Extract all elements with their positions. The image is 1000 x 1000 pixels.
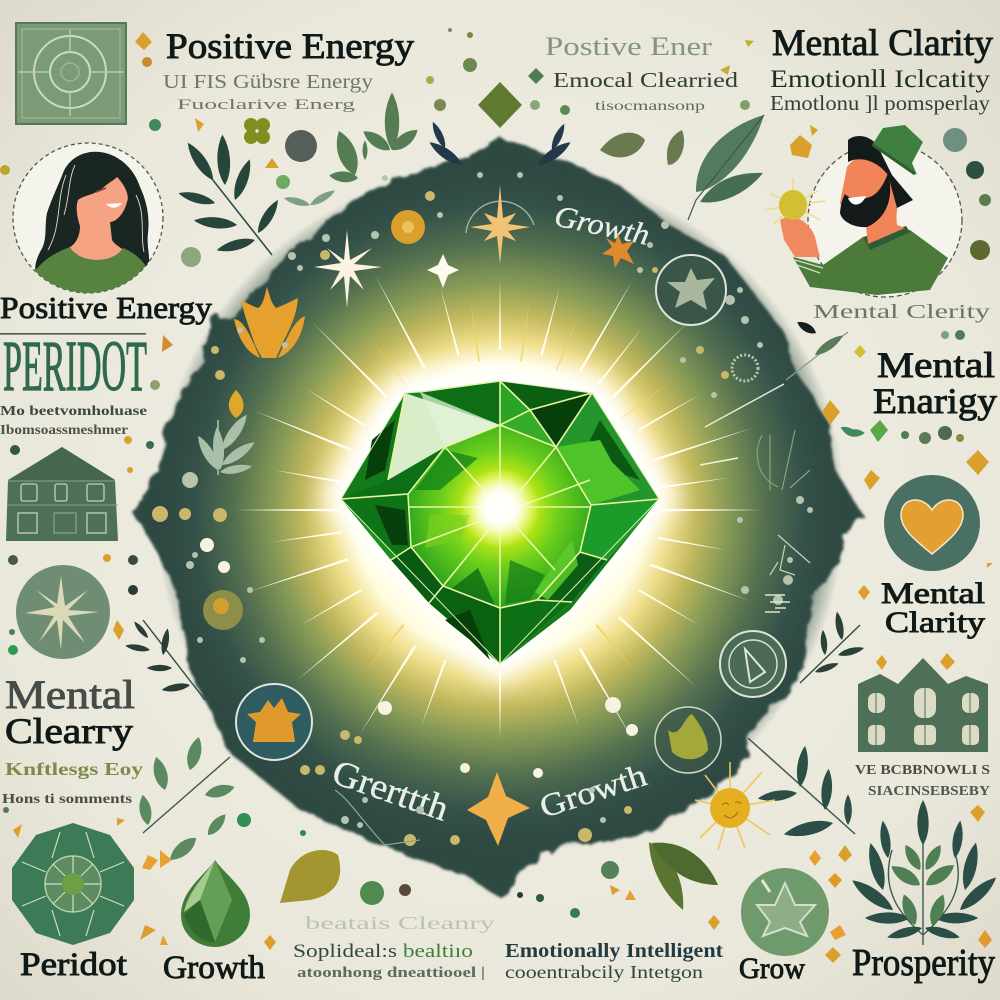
heading: mental clarity: Mental Clarity xyxy=(772,23,993,64)
caption: sophisticated healing: Soplideal:s bealtiıo xyxy=(293,941,473,962)
icon: ring badge lower right xyxy=(720,631,786,697)
label: growth top: Growth xyxy=(552,200,652,252)
subheading: small faded line: tisocmansonp xyxy=(595,99,705,114)
branch: right dark xyxy=(800,611,865,683)
label: peridot: Peridot xyxy=(20,947,127,983)
label: mental clearty: Mental xyxy=(5,672,135,717)
peridot gem xyxy=(341,381,659,664)
subheading: emotional prosperity: Emotlonu ]l pomsperlay xyxy=(770,91,991,115)
label: mental clearty: Clearгy xyxy=(5,711,133,751)
label: positive energy: Positive Energy xyxy=(0,290,213,325)
icon: gold star in ring xyxy=(466,185,534,264)
icon: orange star xyxy=(602,234,634,268)
label: growth right: Growth xyxy=(535,756,651,825)
branch: bottom right xyxy=(748,738,855,840)
text: PERIDOT xyxy=(3,326,147,406)
light rays xyxy=(235,275,765,740)
central dark circle panel xyxy=(133,137,863,897)
icon: white sparkle xyxy=(314,230,382,308)
label: mental energy xyxy=(873,345,997,421)
icon: heart medallion xyxy=(884,475,980,571)
caption: peridot line two: Ibomsoassmeshmer xyxy=(0,423,128,438)
caption: second emotional line: cooentrabcily Intetgon xyxy=(505,962,703,982)
branch: upper left xyxy=(177,134,282,255)
label: mental energy: Mental xyxy=(877,345,995,385)
icon: target square xyxy=(16,23,126,124)
icon: golden tulip xyxy=(234,287,305,358)
icon: star medallion xyxy=(16,565,110,659)
icon: woman portrait xyxy=(13,143,163,300)
label: mental clarity lower: Mental xyxy=(881,577,985,610)
icon: smiling sun xyxy=(695,762,775,850)
caption: faded clarity: beatais Cleanry xyxy=(305,913,495,933)
label: mental clarity lower xyxy=(881,577,985,639)
icon: golden fruit xyxy=(280,850,411,905)
caption: olive text: Knftlesgs Eoy xyxy=(5,759,143,779)
icon: gold star bottom xyxy=(467,772,530,846)
label: faded mental clarity: Mental Clerity xyxy=(813,301,990,323)
label: growth: Growth xyxy=(163,950,265,986)
icon: diamond sparkle xyxy=(427,254,459,288)
icon: building xyxy=(858,658,988,752)
chalk flower and plant details xyxy=(175,355,810,845)
icon: peridot medallion xyxy=(12,823,134,945)
gem halo xyxy=(341,381,659,664)
icon: large leaves upper right xyxy=(688,115,764,220)
branch: upper right twig xyxy=(786,319,865,438)
branch: left dark xyxy=(125,620,205,700)
label: mental clarity lower: Clarity xyxy=(885,606,985,639)
icon: man portrait xyxy=(765,125,962,297)
icon: gold bud and pale plant xyxy=(194,390,257,476)
subheading: small energy line: Fuoclarive Energ xyxy=(177,97,356,113)
icon: leaf badge right xyxy=(655,707,721,773)
icon: gold flower xyxy=(391,210,425,244)
icon: ring badge upper right xyxy=(656,255,726,325)
caption: building line one: VE BCBBNOWLI S xyxy=(855,763,990,778)
subheading: energy line: UI FIS Gübsre Energy xyxy=(163,71,373,93)
icon: two olive leaves xyxy=(649,842,718,910)
subheading: emotional clarity: Emotionll Iclcatity xyxy=(770,66,991,93)
icon: laurel plant xyxy=(849,800,1000,945)
heading: faded positive energy: Postive Ener xyxy=(545,32,712,61)
caption: emotionally intelligent: Emotionally Intelligent xyxy=(505,940,723,962)
icon: green gem xyxy=(181,860,250,947)
caption: grey line: atoonhong dneattiooel | xyxy=(297,965,485,981)
label: grow: Grow xyxy=(739,952,805,985)
caption: peridot line one: Mo beetvomholuase xyxy=(0,404,147,419)
caption: building line two: SIACINSEBSEBY xyxy=(868,784,990,799)
heading: positive energy: Positive Energy xyxy=(166,26,414,66)
label: mental clearty xyxy=(5,672,135,751)
radial glow xyxy=(155,165,845,855)
icons: top plants xyxy=(181,82,684,267)
icon: swirl circle xyxy=(203,590,243,630)
label: growth left: Grerttth xyxy=(327,752,454,829)
branch: lower left green xyxy=(137,735,236,865)
icon: crown badge xyxy=(236,684,312,760)
icon: star orb xyxy=(741,868,829,956)
subheading: emocal cleared: Emocal Clearried xyxy=(553,68,739,92)
icon: manor house xyxy=(6,447,118,541)
small flowers and specks in panel xyxy=(152,172,813,846)
label: mental energy: Enarigy xyxy=(873,381,997,421)
caption: grey text: Hons ti somments xyxy=(2,792,133,807)
